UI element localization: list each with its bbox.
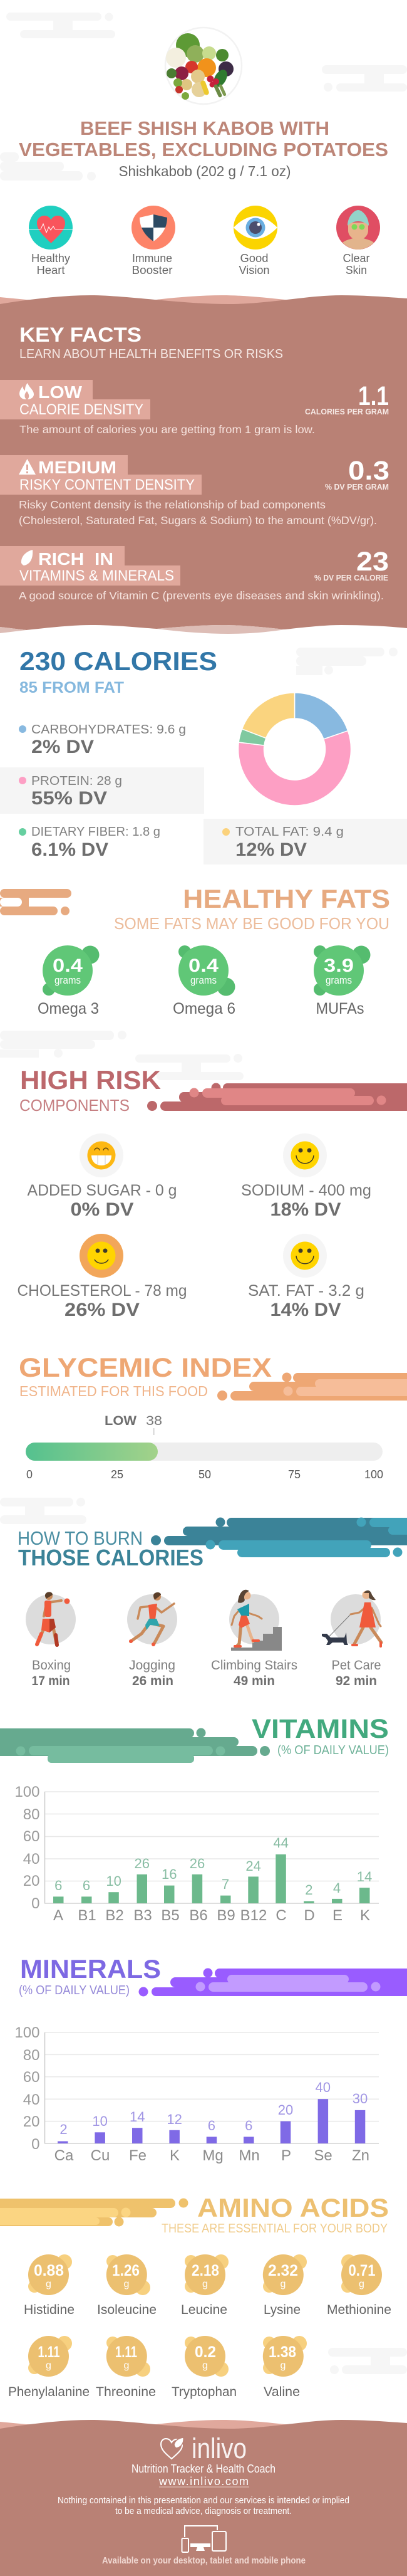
activity: climbing stairs xyxy=(211,1590,297,1688)
amino: histidine: g xyxy=(46,2279,51,2289)
amino: threonine xyxy=(96,2336,156,2399)
fat badge: MUFAs: MUFAs xyxy=(316,1000,364,1017)
bar chart: minerals: Mg xyxy=(202,2147,224,2164)
activity: boxing xyxy=(26,1592,76,1688)
benefit: immune booster: Immune xyxy=(132,252,172,265)
vitamins heading: VITAMINS xyxy=(252,1714,389,1744)
legend: dietary fiber xyxy=(19,825,160,860)
fact: rich in vitamins and minerals: VITAMINS & MINERALS xyxy=(19,567,174,584)
fat badge: omega 3 xyxy=(38,945,99,1017)
minerals decoration xyxy=(139,1969,407,1996)
risk: sodium xyxy=(241,1133,371,1220)
legend: protein xyxy=(0,767,204,814)
fact: medium risky content density xyxy=(0,455,389,527)
risk: added sugar xyxy=(28,1133,177,1220)
icon: leaf xyxy=(21,550,33,565)
minerals heading: MINERALS xyxy=(20,1954,161,1984)
bar chart: vitamins: B3 xyxy=(133,1907,152,1924)
bar chart: vitamins: 26 xyxy=(190,1856,205,1871)
legend: carbohydrates xyxy=(19,723,186,757)
bar chart: minerals: 14 xyxy=(130,2109,145,2125)
footer disclaimer xyxy=(58,2495,349,2516)
bar chart: vitamins: B6 xyxy=(189,1907,208,1924)
fat badge: MUFAs xyxy=(314,945,371,1017)
healthy fats decoration xyxy=(0,889,71,915)
fact: medium risky content density: Risky Content density is the relationship of bad components xyxy=(19,498,326,511)
bar chart: vitamins: 7 xyxy=(222,1876,229,1892)
bar chart: vitamins: 14 xyxy=(357,1869,372,1885)
bar chart: minerals: 30 xyxy=(353,2091,368,2106)
amino: methionine xyxy=(327,2254,391,2317)
bar chart: minerals: 100 xyxy=(14,2024,40,2041)
fat badge: MUFAs: grams xyxy=(326,974,352,986)
fact: low calorie density: LOW xyxy=(38,382,83,402)
bar chart: vitamins: E xyxy=(332,1907,343,1924)
fact: rich in vitamins and minerals: % DV PER CALORIE xyxy=(314,573,388,582)
bar chart: minerals: Se xyxy=(314,2147,332,2164)
amino: lysine: 2.32 xyxy=(268,2262,298,2279)
bar chart: vitamins: 26 xyxy=(135,1856,150,1871)
amino: methionine: Methionine xyxy=(327,2303,391,2317)
bar chart: vitamins: 2 xyxy=(305,1882,313,1898)
title xyxy=(19,117,388,160)
amino: leucine: 2.18 xyxy=(192,2262,219,2279)
amino: lysine: g xyxy=(281,2279,286,2289)
logo: inlivo: inlivo xyxy=(192,2432,247,2464)
donut chart: macronutrients xyxy=(239,693,351,806)
bar chart: vitamins: 44 xyxy=(273,1835,289,1851)
activity: jogging: 26 min xyxy=(132,1674,173,1688)
amino: isoleucine: g xyxy=(124,2279,129,2289)
activity: jogging xyxy=(127,1592,177,1688)
risk: cholesterol xyxy=(18,1234,187,1320)
how to burn decoration xyxy=(151,1517,407,1557)
vitamins decoration xyxy=(0,1728,270,1763)
amino acids subheading: THESE ARE ESSENTIAL FOR YOUR BODY xyxy=(162,2222,388,2236)
amino: leucine xyxy=(181,2254,229,2317)
risk: sodium: SODIUM - 400 mg xyxy=(241,1182,371,1199)
fat badge: omega 3: 0.4 xyxy=(53,955,83,976)
fact: low calorie density: The amount of calories you are getting from 1 gram is low. xyxy=(19,423,315,436)
bar chart: minerals: 20 xyxy=(23,2113,40,2130)
amino: isoleucine: Isoleucine xyxy=(97,2303,157,2317)
bar chart: vitamins: 100 xyxy=(14,1784,40,1801)
footer tagline: Nutrition Tracker & Health Coach xyxy=(131,2463,276,2475)
bar chart: vitamins: K xyxy=(360,1907,370,1924)
glycemic index heading: GLYCEMIC INDEX xyxy=(19,1353,272,1383)
legend: carbohydrates: CARBOHYDRATES: 9.6 g xyxy=(31,723,186,737)
fact: low calorie density: CALORIE DENSITY xyxy=(19,401,143,418)
activity: climbing stairs: 49 min xyxy=(234,1674,275,1688)
amino: valine xyxy=(263,2336,307,2399)
legend: total fat: 12% DV xyxy=(235,839,307,860)
amino: histidine: Histidine xyxy=(24,2303,75,2317)
bar chart: minerals: 10 xyxy=(92,2113,108,2129)
bar chart: vitamins: 4 xyxy=(333,1880,341,1896)
fat badge: omega 6 xyxy=(173,945,235,1017)
benefit: good vision: Vision xyxy=(239,264,269,276)
glycemic decoration xyxy=(217,1373,407,1401)
fact: low calorie density: CALORIES PER GRAM xyxy=(305,407,389,416)
logo: inlivo xyxy=(161,2432,247,2464)
fat badge: omega 6: Omega 6 xyxy=(173,1000,235,1017)
bar chart: vitamins: 0 xyxy=(31,1895,40,1912)
benefit: immune booster: Booster xyxy=(131,264,173,276)
fact: medium risky content density: MEDIUM xyxy=(38,458,116,477)
fact: medium risky content density: (Cholesterol, Saturated Fat, Sugars & Sodium) to the amount (%DV/gr). xyxy=(19,514,377,527)
fat badge: omega 6: 0.4 xyxy=(188,955,219,976)
panel: footer xyxy=(0,2420,407,2576)
fact: medium risky content density: % DV PER GRAM xyxy=(325,482,389,492)
amino: phenylalanine: Phenylalanine xyxy=(8,2385,90,2399)
risk: added sugar: 0% DV xyxy=(70,1199,134,1220)
bar chart: vitamins: B1 xyxy=(78,1907,96,1924)
fat badge: omega 3: Omega 3 xyxy=(38,1000,99,1017)
panel: key facts xyxy=(0,295,407,634)
risk: cholesterol: 26% DV xyxy=(64,1300,140,1320)
fact: rich in vitamins and minerals: A good source of Vitamin C (prevents eye diseases and skin wrinkling). xyxy=(19,589,384,602)
activity: pet care xyxy=(322,1590,382,1688)
bar chart: minerals: 2 xyxy=(59,2121,68,2137)
activity: boxing: 17 min xyxy=(31,1674,70,1688)
bar chart: vitamins: B12 xyxy=(240,1907,267,1924)
benefit: healthy heart xyxy=(29,206,73,276)
serving size: Shishkabob (202 g / 7.1 oz) xyxy=(119,163,291,179)
legend: dietary fiber: 6.1% DV xyxy=(31,839,108,860)
fact: rich in vitamins and minerals: 23 xyxy=(356,547,389,577)
benefit: good vision: Good xyxy=(240,252,268,265)
glycemic index gauge xyxy=(26,1414,383,1481)
benefit: healthy heart: Heart xyxy=(36,264,65,276)
risk: cholesterol: CHOLESTEROL - 78 mg xyxy=(18,1282,187,1300)
bar chart: minerals: K xyxy=(170,2147,180,2164)
bar chart: vitamins: B5 xyxy=(161,1907,180,1924)
fact: medium risky content density: RISKY CONTENT DENSITY xyxy=(19,476,195,493)
bar chart: vitamins: 80 xyxy=(23,1806,40,1823)
glycemic index gauge: LOW xyxy=(105,1414,137,1428)
amino: valine: g xyxy=(281,2360,286,2371)
bar chart: minerals: Fe xyxy=(129,2147,147,2164)
bar chart: vitamins: D xyxy=(304,1907,315,1924)
glycemic index gauge: 75 xyxy=(288,1468,301,1481)
high risk decoration xyxy=(147,1083,407,1111)
benefit: clear skin xyxy=(336,206,380,276)
bar chart: minerals: 12 xyxy=(167,2111,182,2127)
how to burn heading xyxy=(18,1527,204,1570)
healthy fats heading: HEALTHY FATS xyxy=(183,884,390,913)
amino: tryptophan xyxy=(172,2336,237,2399)
fact: medium risky content density: 0.3 xyxy=(348,456,389,486)
icon: warning triangle xyxy=(19,459,36,475)
risk: sodium: 18% DV xyxy=(270,1199,341,1220)
legend: protein: 55% DV xyxy=(31,788,107,809)
fact: low calorie density xyxy=(0,380,389,436)
fact: rich in vitamins and minerals: RICH IN xyxy=(38,549,113,569)
amino: threonine: g xyxy=(124,2360,129,2371)
amino acids heading: AMINO ACIDS xyxy=(197,2193,389,2222)
benefit: immune booster xyxy=(131,206,175,276)
amino: threonine: 1.11 xyxy=(115,2343,137,2361)
benefit: good vision xyxy=(234,206,277,276)
bar chart: minerals: 40 xyxy=(316,2079,331,2095)
bar chart: minerals: 0 xyxy=(31,2136,40,2153)
benefit: healthy heart: Healthy xyxy=(31,252,70,265)
bar chart: minerals xyxy=(14,2024,379,2164)
bar chart: minerals: 6 xyxy=(208,2118,215,2133)
legend: total fat: TOTAL FAT: 9.4 g xyxy=(235,825,344,839)
title: VEGETABLES, EXCLUDING POTATOES xyxy=(19,139,388,160)
bar chart: minerals: P xyxy=(281,2147,291,2164)
activity: pet care: Pet Care xyxy=(332,1658,381,1673)
bar chart: minerals: Ca xyxy=(54,2147,74,2164)
bar chart: minerals: 6 xyxy=(245,2118,252,2133)
amino: threonine: Threonine xyxy=(96,2385,156,2399)
amino: isoleucine: 1.26 xyxy=(112,2262,140,2279)
amino: methionine: g xyxy=(359,2279,364,2289)
amino: methionine: 0.71 xyxy=(348,2262,376,2279)
bar chart: vitamins: 6 xyxy=(83,1878,90,1893)
key facts subheading: LEARN ABOUT HEALTH BENEFITS OR RISKS xyxy=(19,347,283,361)
amino: leucine: Leucine xyxy=(181,2303,227,2317)
amino: leucine: g xyxy=(202,2279,208,2289)
bar chart: minerals: 80 xyxy=(23,2047,40,2064)
bar chart: minerals: Mn xyxy=(239,2147,260,2164)
fat badge: omega 3: grams xyxy=(54,974,81,986)
amino acids decoration xyxy=(0,2198,188,2227)
footer disclaimer: to be a medical advice, diagnosis or treatment. xyxy=(115,2506,292,2516)
glycemic index subheading: ESTIMATED FOR THIS FOOD xyxy=(19,1383,208,1399)
bar chart: vitamins: 10 xyxy=(106,1873,121,1889)
glycemic index gauge: 38 xyxy=(146,1414,162,1428)
bar chart: vitamins xyxy=(14,1784,379,1924)
bar chart: minerals: Zn xyxy=(352,2147,369,2164)
title: BEEF SHISH KABOB WITH xyxy=(80,117,329,139)
risk: saturated fat: 14% DV xyxy=(270,1300,341,1320)
amino: valine: 1.38 xyxy=(269,2343,296,2361)
bar chart: vitamins: 16 xyxy=(162,1866,177,1882)
risk: added sugar: ADDED SUGAR - 0 g xyxy=(28,1182,177,1199)
fat badge: MUFAs: 3.9 xyxy=(324,955,354,976)
bar chart: minerals: 20 xyxy=(278,2102,293,2118)
how to burn heading: HOW TO BURN xyxy=(18,1527,143,1549)
benefit: clear skin: Clear xyxy=(343,252,370,265)
glycemic index gauge: 25 xyxy=(111,1468,123,1481)
legend: protein: PROTEIN: 28 g xyxy=(31,774,122,788)
bar chart: vitamins: 20 xyxy=(23,1873,40,1890)
footer disclaimer: Nothing contained in this presentation and our services is intended or implied xyxy=(58,2495,349,2506)
fact: rich in vitamins and minerals xyxy=(0,546,389,602)
how to burn heading: THOSE CALORIES xyxy=(18,1545,204,1570)
calories from fat: 85 FROM FAT xyxy=(19,679,124,697)
amino: isoleucine xyxy=(97,2254,157,2317)
bar chart: vitamins: 40 xyxy=(23,1851,40,1868)
legend: dietary fiber: DIETARY FIBER: 1.8 g xyxy=(31,825,160,839)
legend: carbohydrates: 2% DV xyxy=(31,737,94,757)
glycemic index gauge: 100 xyxy=(364,1468,383,1481)
amino: phenylalanine xyxy=(8,2336,90,2399)
bar chart: vitamins: 24 xyxy=(245,1858,261,1874)
key facts heading: KEY FACTS xyxy=(19,323,142,346)
healthy fats subheading: SOME FATS MAY BE GOOD FOR YOU xyxy=(114,914,389,933)
amino: tryptophan: g xyxy=(202,2360,208,2371)
amino: tryptophan: Tryptophan xyxy=(172,2385,237,2399)
footer availability note: Available on your desktop, tablet and mobile phone xyxy=(102,2555,306,2566)
activity: jogging: Jogging xyxy=(129,1658,175,1673)
amino: tryptophan: 0.2 xyxy=(195,2343,216,2361)
amino: phenylalanine: g xyxy=(46,2360,51,2371)
activity: boxing: Boxing xyxy=(32,1658,71,1673)
bar chart: minerals: 40 xyxy=(23,2091,40,2108)
activity: climbing stairs: Climbing Stairs xyxy=(211,1658,297,1673)
icon: devices xyxy=(182,2526,226,2552)
vitamins subheading: (% OF DAILY VALUE) xyxy=(277,1743,389,1757)
amino: valine: Valine xyxy=(264,2385,300,2399)
icon: flame xyxy=(19,383,34,399)
amino: lysine xyxy=(263,2254,307,2317)
high risk heading: HIGH RISK xyxy=(20,1065,161,1095)
amino: histidine xyxy=(24,2254,75,2317)
bar chart: vitamins: 6 xyxy=(54,1878,62,1893)
legend: total fat xyxy=(204,819,407,865)
calories heading: 230 CALORIES xyxy=(19,646,217,676)
bar chart: vitamins: B9 xyxy=(217,1907,235,1924)
minerals subheading: (% OF DAILY VALUE) xyxy=(19,1984,130,1997)
bar chart: vitamins: C xyxy=(276,1907,287,1924)
bar chart: vitamins: B2 xyxy=(105,1907,124,1924)
fact: low calorie density: 1.1 xyxy=(358,381,389,411)
bar chart: minerals: Cu xyxy=(91,2147,110,2164)
glycemic index gauge: 0 xyxy=(26,1468,33,1481)
bar chart: vitamins: 60 xyxy=(23,1828,40,1845)
amino: phenylalanine: 1.11 xyxy=(38,2343,60,2361)
bar chart: vitamins: A xyxy=(53,1907,63,1924)
benefit: clear skin: Skin xyxy=(346,264,367,276)
high risk subheading: COMPONENTS xyxy=(19,1096,130,1115)
amino: histidine: 0.88 xyxy=(34,2262,64,2279)
food image: vegetables xyxy=(165,28,242,104)
fat badge: omega 6: grams xyxy=(190,974,217,986)
footer website: www.inlivo.com xyxy=(158,2475,249,2488)
risk: saturated fat: SAT. FAT - 3.2 g xyxy=(248,1282,364,1300)
bar chart: minerals: 60 xyxy=(23,2069,40,2086)
risk: saturated fat xyxy=(248,1234,364,1320)
activity: pet care: 92 min xyxy=(336,1674,377,1688)
glycemic index gauge: 50 xyxy=(198,1468,211,1481)
amino: lysine: Lysine xyxy=(264,2303,301,2317)
